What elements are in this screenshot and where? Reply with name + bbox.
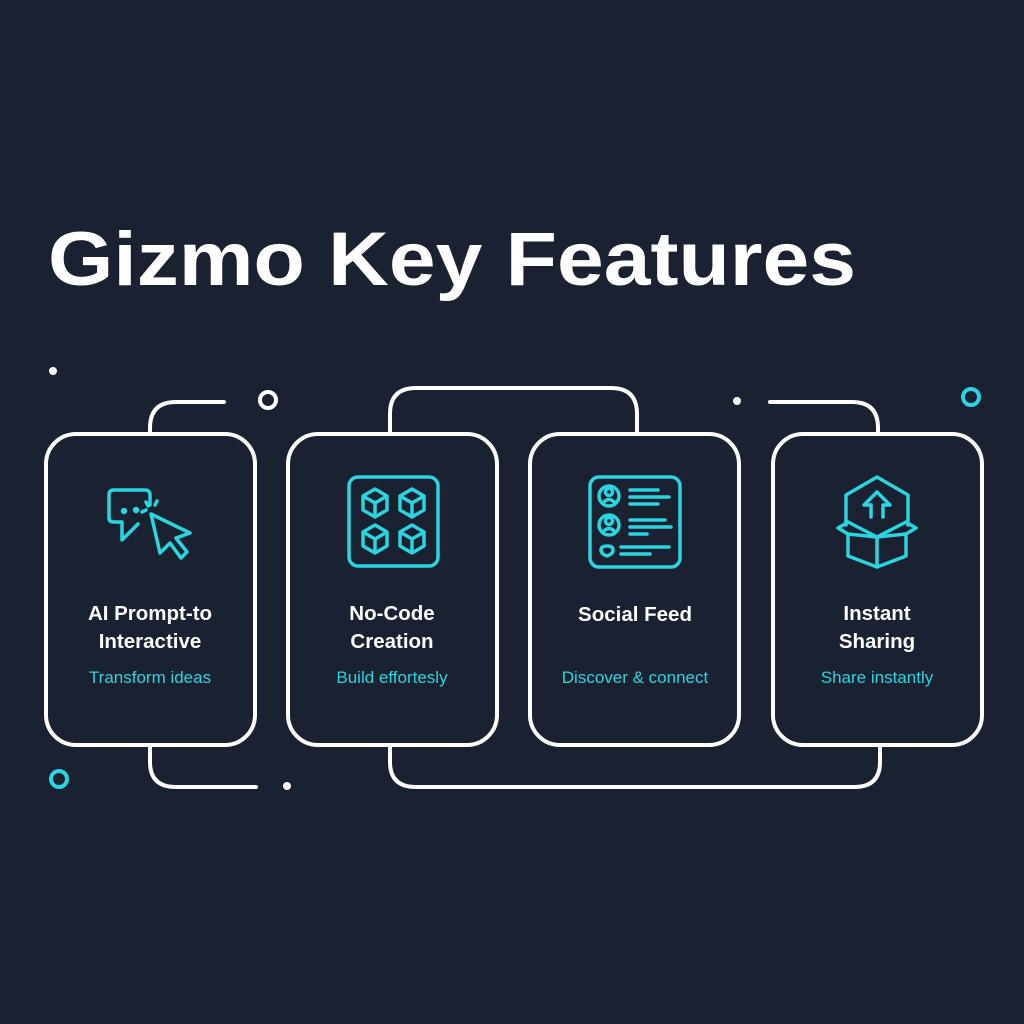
icon: chat with cursor xyxy=(109,490,190,558)
card subtitle: Discover & connect xyxy=(562,668,709,687)
panel: No-Code Creation: Creation xyxy=(350,630,434,653)
panel: No-Code Creation xyxy=(288,434,497,745)
card title: Social Feed xyxy=(578,603,692,626)
panel: AI Prompt-to Interactive: Interactive xyxy=(99,630,201,653)
panel: Social Feed xyxy=(530,434,739,745)
decorative dots xyxy=(49,367,979,790)
card title: No-Code xyxy=(349,602,435,625)
card title: Instant xyxy=(843,602,911,625)
card subtitle: Transform ideas xyxy=(89,668,211,687)
card subtitle: Share instantly xyxy=(821,668,934,687)
panel: AI Prompt-to Interactive xyxy=(46,434,255,745)
card subtitle: Build effortesly xyxy=(336,668,448,687)
icon: box with up arrow xyxy=(838,477,916,567)
card title: AI Prompt-to xyxy=(88,602,212,625)
icon: feed list xyxy=(590,477,680,567)
connector lines xyxy=(150,388,880,787)
icon: blocks grid xyxy=(349,477,438,566)
panel: Instant Sharing: Sharing xyxy=(839,630,915,653)
panel: Instant Sharing xyxy=(773,434,982,745)
title: Gizmo Key Features xyxy=(48,217,856,302)
